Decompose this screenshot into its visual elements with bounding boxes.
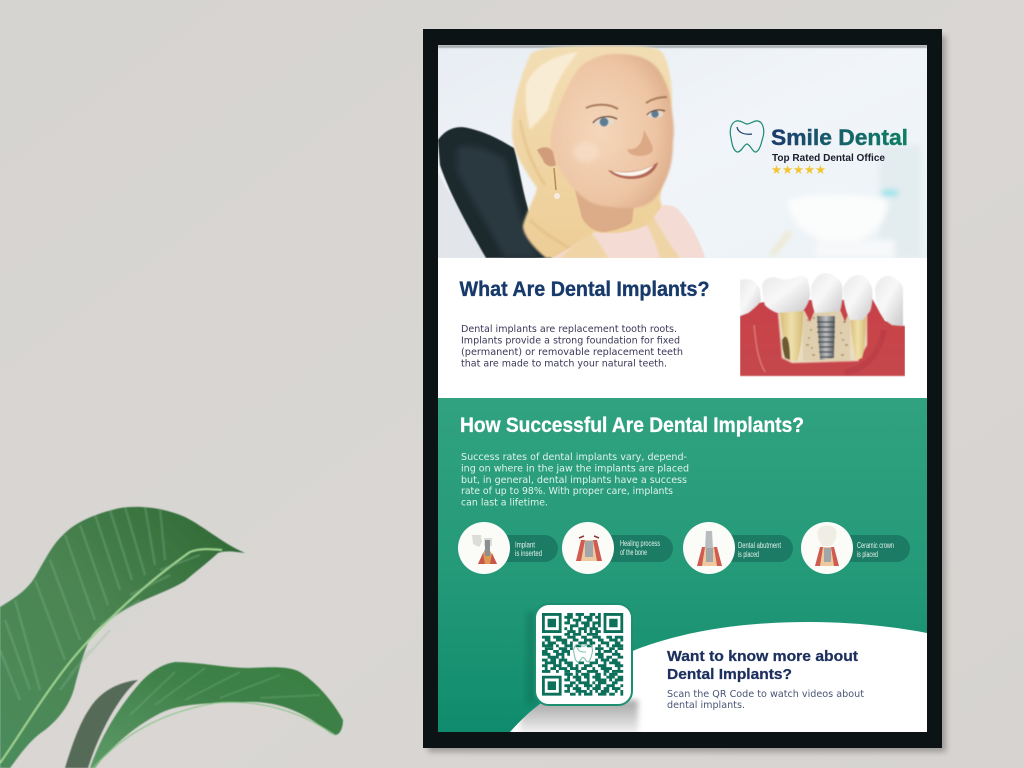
step 4: ceramic crown is placed: is placed [857, 550, 878, 559]
panel: how successful are dental implants [438, 398, 927, 734]
cheek highlight [573, 142, 599, 162]
callout: want to know more: Want to know more about [667, 648, 858, 665]
QR card shadow [520, 700, 638, 734]
step 2: healing process of the bone: of the bone [620, 548, 647, 557]
facial features [586, 97, 667, 179]
hair highlight [526, 52, 578, 130]
plant leaves [0, 507, 343, 768]
poster frame shadow [428, 36, 946, 752]
body text: can last a lifetime. [461, 498, 548, 508]
step 3: dental abutment is placed [683, 522, 793, 574]
body text: Implants provide a strong foundation for fixed [461, 336, 680, 346]
QR code card [526, 604, 632, 705]
bone [803, 311, 850, 361]
hero photo [438, 45, 927, 258]
neck [575, 190, 634, 232]
step 1: implant is inserted: is inserted [515, 549, 542, 558]
hair over sweater [560, 217, 680, 258]
natural tooth roots [780, 310, 803, 361]
face [550, 54, 674, 208]
QR modules [542, 614, 623, 694]
body text [461, 324, 683, 370]
poster page [438, 45, 927, 734]
step 2: healing process of the bone [562, 522, 673, 574]
sweater [553, 205, 705, 258]
dental chair [438, 127, 552, 258]
logo wordmark: Smile Dental [771, 125, 908, 150]
gum wedges beside implant crown [804, 310, 850, 322]
jaw socket [778, 313, 867, 363]
body text [461, 452, 689, 508]
body text: Success rates of dental implants vary, depend- [461, 452, 687, 463]
callout: want to know more: Scan the QR Code to watch videos about [667, 689, 864, 700]
step 4: ceramic crown is placed: Ceramic crown [857, 541, 894, 550]
Smile Dental logo [730, 121, 908, 177]
blurred sink in background [772, 145, 920, 258]
body text: Dental implants are replacement tooth roots. [461, 324, 677, 335]
step 2: healing process of the bone: Healing process [620, 539, 660, 548]
illustration: implant among natural teeth [740, 273, 905, 376]
body text: (permanent) or removable replacement teeth [461, 347, 683, 358]
step 3: dental abutment is placed: Dental abutment [738, 541, 782, 550]
leaf: large left leaf [0, 507, 245, 768]
heading: What Are Dental Implants? [460, 277, 710, 301]
hair [512, 46, 680, 258]
implant screw [817, 316, 835, 360]
body text: rate of up to 98%. With proper care, implants [461, 486, 673, 497]
leaf: dark stalk behind [65, 680, 138, 768]
gum [740, 295, 905, 376]
black poster frame [423, 29, 942, 748]
panel: what are dental implants [438, 258, 927, 398]
leaf: lower right leaf [90, 662, 343, 768]
ear [537, 147, 556, 166]
white curved callout background [510, 622, 927, 732]
callout: want to know more: dental implants. [667, 700, 745, 711]
earring [554, 168, 560, 199]
icon: tooth logo [730, 121, 764, 152]
step 1: implant is inserted: Implant [515, 540, 536, 550]
step 1: implant is inserted [458, 522, 558, 574]
callout: want to know more: Dental Implants? [667, 666, 792, 683]
body text: but, in general, dental implants have a success [461, 475, 687, 486]
crowns [740, 279, 761, 316]
icon: tooth in QR centre [574, 644, 592, 662]
callout: want to know more [667, 648, 864, 711]
body text: ing on where in the jaw the implants are placed [461, 464, 689, 474]
tagline: Top Rated Dental Office [772, 152, 885, 164]
woman portrait [512, 46, 705, 258]
heading: How Successful Are Dental Implants? [460, 414, 804, 437]
five star rating: ★★★★★ [771, 162, 826, 177]
step 4: ceramic crown is placed [801, 522, 910, 574]
step 3: dental abutment is placed: is placed [738, 550, 759, 559]
body text: that are made to match your natural teeth. [461, 358, 667, 370]
